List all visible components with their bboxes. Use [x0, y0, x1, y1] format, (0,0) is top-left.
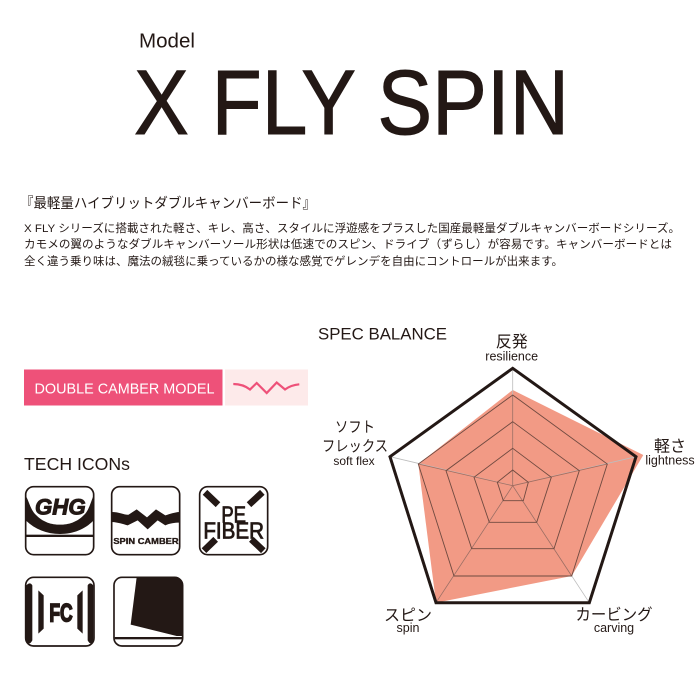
heading: tech icons: TECH ICONs: [24, 454, 130, 474]
description line 3: 全く違う乗り味は、魔法の絨毯に乗っているかの様な感覚でゲレンデを自由にコントロールが出来ます。: [24, 254, 563, 268]
data polygon: [418, 390, 643, 603]
text block: description: [20, 195, 680, 268]
label: Model: Model: [139, 30, 195, 52]
axis label: spin: spin: [397, 621, 420, 635]
inner spokes over fill: [418, 395, 607, 603]
badge label: DOUBLE CAMBER MODEL: [34, 381, 214, 397]
icon: sidewall: [114, 577, 183, 646]
icon: GHG: [26, 487, 94, 555]
heading: spec balance: SPEC BALANCE: [318, 326, 447, 344]
icon: spin camber: [112, 487, 180, 555]
FIBER lettering: FIBER: [203, 518, 264, 544]
spin camber lettering: SPIN CAMBER: [113, 536, 179, 546]
axis label: spin: [384, 608, 432, 635]
scale rings: [418, 395, 607, 576]
axis label: lightness: [645, 438, 695, 468]
icon: camber profile: [225, 370, 308, 406]
axis label: soft flex: フレックス: [322, 438, 388, 455]
axis label: carving: カービング: [576, 606, 652, 624]
axis label: lightness: lightness: [645, 454, 695, 468]
axis label: resilience: 反発: [496, 333, 528, 351]
axis label: soft flex: [322, 419, 388, 468]
axis label: soft flex: soft flex: [333, 454, 375, 468]
icon: FC: [26, 577, 94, 646]
axis label: carving: carving: [594, 621, 634, 635]
description line 1: X FLY シリーズに搭載された軽さ、キレ、高さ、スタイルに浮遊感をプラスした国産最軽量ダブルキャンバーボードシリーズ。: [24, 221, 680, 235]
PE lettering: PE: [221, 501, 246, 527]
spokes: [390, 368, 636, 603]
description line 2: カモメの翼のようなダブルキャンバーソール形状は低速でのスピン、ドライブ（ずらし）が容易です。キャンバーボードとは: [24, 237, 672, 251]
axis label: spin: スピン: [384, 608, 432, 624]
axis label: resilience: [485, 333, 538, 364]
axis label: resilience: resilience: [485, 350, 538, 364]
axis label: carving: [576, 606, 652, 635]
badge: double camber model: [24, 370, 222, 406]
GHG lettering: GHG: [35, 494, 86, 519]
axis label: soft flex: ソフト: [335, 419, 375, 436]
axis label: lightness: 軽さ: [654, 438, 686, 456]
outer pentagon: [390, 368, 636, 603]
FC lettering: FC: [49, 599, 73, 627]
radar chart: [390, 368, 643, 603]
description heading: 『最軽量ハイブリットダブルキャンバーボード』: [20, 195, 316, 211]
title: X FLY SPIN: [134, 52, 569, 154]
icon: PE fiber: [200, 487, 268, 555]
